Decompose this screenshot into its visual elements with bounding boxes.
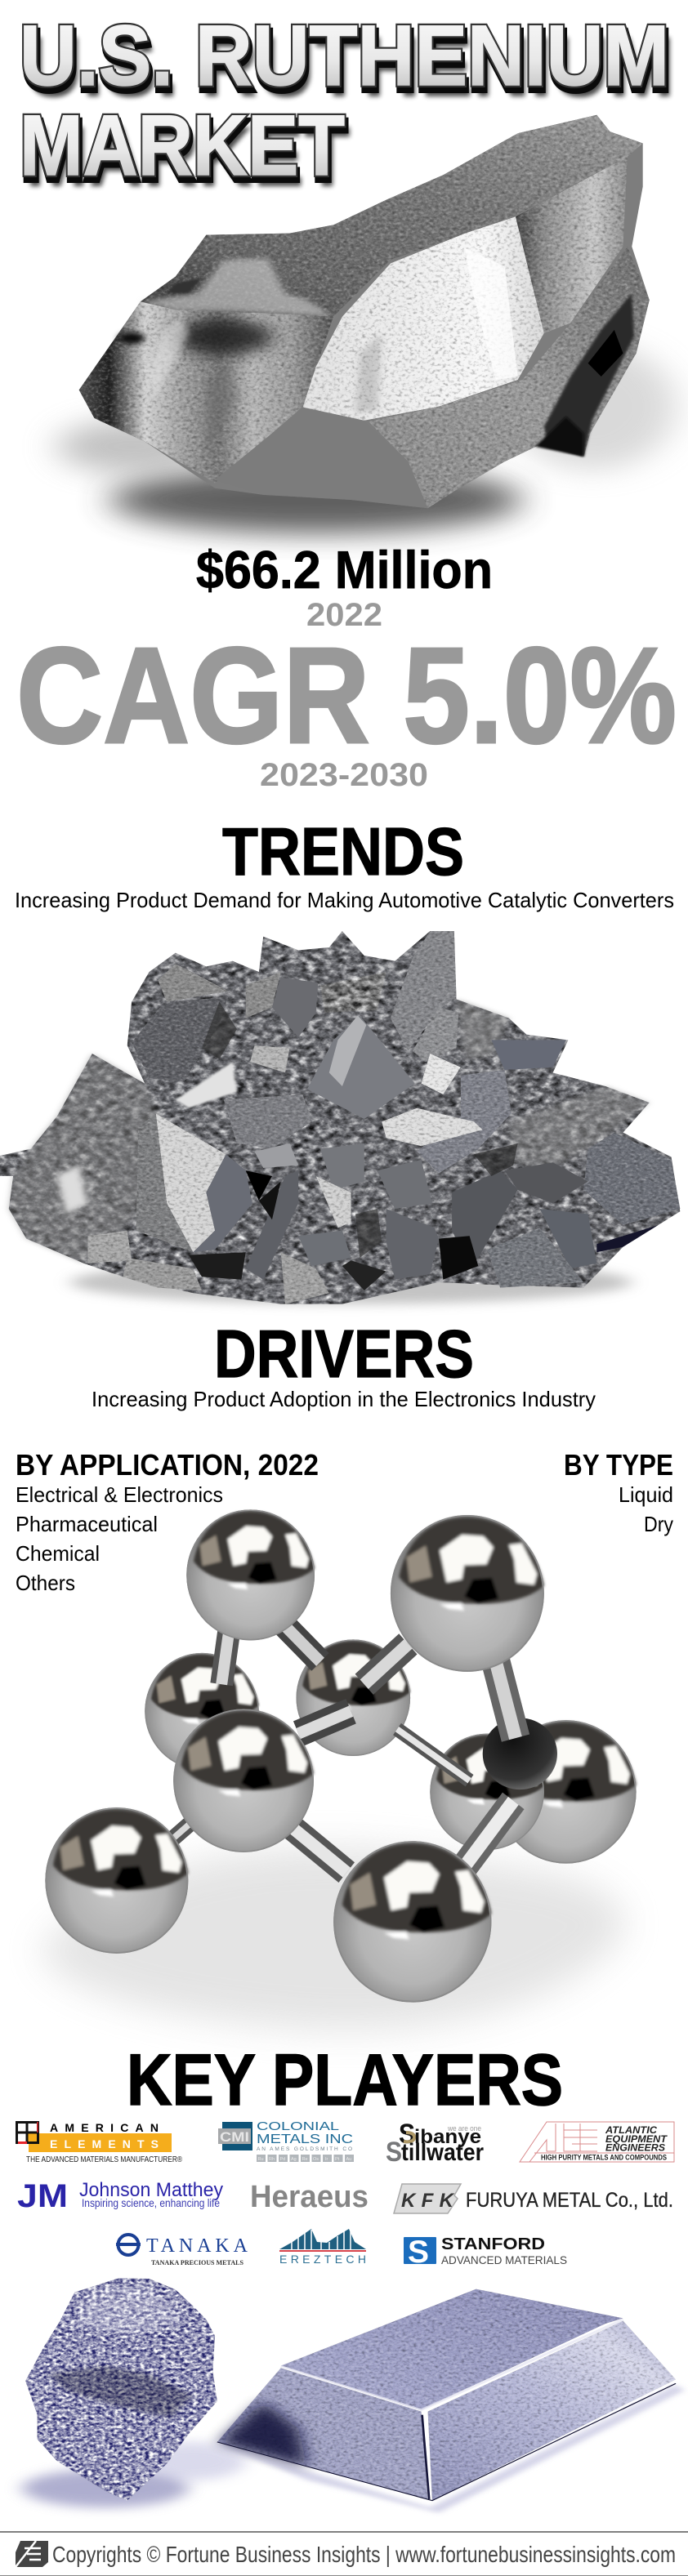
ingot shadow xyxy=(219,2385,685,2513)
nugget xyxy=(25,2278,217,2501)
logo: Atlantic Equipment Engineers xyxy=(520,2122,674,2162)
image: chrome molecule model xyxy=(39,1509,637,2030)
logo: Colonial Metals: Rh xyxy=(269,2157,275,2162)
trends description: Increasing Product Demand for Making Automotive Catalytic Converters xyxy=(15,888,674,912)
logo: Colonial Metals xyxy=(218,2119,354,2162)
rock ground shadow xyxy=(109,466,522,533)
title: U.S. Ruthenium Market: MARKET xyxy=(25,109,351,205)
logo: Stanford Advanced Materials: STANFORD xyxy=(441,2235,545,2253)
logo: Johnson Matthey: Johnson Matthey xyxy=(79,2179,223,2201)
title: U.S. Ruthenium Market: MARKET xyxy=(20,98,345,194)
molecule ground shadow xyxy=(39,1847,625,2030)
logo: Colonial Metals: AN AMES GOLDSMITH CO xyxy=(257,2146,352,2152)
logo: Sibanye Stillwater: S xyxy=(386,2137,402,2168)
logo: Sibanye Stillwater: we are one xyxy=(447,2124,481,2133)
title: U.S. Ruthenium Market: MARKET xyxy=(20,98,345,194)
logo: Colonial Metals: Ru xyxy=(258,2157,264,2162)
application list xyxy=(16,1482,223,1595)
segment heading: by type: BY TYPE xyxy=(564,1448,673,1482)
market value: $66.2 Million xyxy=(196,540,493,599)
logo: Atlantic Equipment Engineers: EQUIPMENT xyxy=(605,2133,668,2145)
logo: Colonial Metals: Pt xyxy=(335,2157,340,2162)
logo: Stanford Advanced Materials: ADVANCED MATERIALS xyxy=(441,2254,567,2266)
logo: American Elements: AMERICAN xyxy=(50,2121,159,2134)
logo: American Elements: THE ADVANCED MATERIALS MANUFACTURER® xyxy=(26,2155,183,2164)
logo: Atlantic Equipment Engineers: HIGH PURITY METALS AND COMPOUNDS xyxy=(541,2153,667,2161)
logo: Colonial Metals: Re xyxy=(302,2157,308,2162)
logo: Johnson Matthey: Inspiring science, enhancing life xyxy=(82,2196,220,2209)
logo: Sibanye Stillwater: S xyxy=(399,2119,415,2150)
logo: Ereztech: EREZTECH xyxy=(279,2253,366,2266)
logo: American Elements xyxy=(16,2121,183,2164)
type list xyxy=(619,1482,673,1536)
application list: Others xyxy=(16,1571,75,1595)
hero image: ruthenium rock xyxy=(57,115,676,533)
dark joint xyxy=(483,1718,557,1789)
logo: Colonial Metals: Os xyxy=(313,2157,319,2162)
icon: Fortune Business Insights logo xyxy=(16,2541,48,2567)
drivers description: Increasing Product Adoption in the Electronics Industry xyxy=(92,1387,596,1411)
application list: Electrical & Electronics xyxy=(16,1482,223,1507)
logo: Atlantic Equipment Engineers: ENGINEERS xyxy=(605,2141,665,2153)
heading: key players: KEY PLAYERS xyxy=(127,2039,563,2120)
application list: Pharmaceutical xyxy=(16,1512,158,1536)
logo: Colonial Metals: Pd xyxy=(279,2157,285,2162)
logo: American Elements: ELEMENTS xyxy=(50,2137,159,2150)
rear spheres xyxy=(145,1653,259,1769)
image: pile of ruthenium crystals xyxy=(0,931,680,1304)
bottom rule xyxy=(0,2575,688,2576)
logo: Johnson Matthey: JM xyxy=(17,2178,68,2214)
logo: Stanford Advanced Materials: S xyxy=(408,2235,429,2270)
forecast period: 2023-2030 xyxy=(260,757,428,793)
logo: Tanaka: TANAKA xyxy=(146,2235,248,2257)
logo: Heraeus: Heraeus xyxy=(250,2180,369,2214)
logo: Sibanye Stillwater: tillwater xyxy=(401,2139,484,2166)
logo: Sibanye Stillwater xyxy=(386,2119,484,2168)
title: U.S. Ruthenium Market: MARKET xyxy=(21,103,346,198)
nugget shadow xyxy=(22,2469,189,2507)
pile ground shadow xyxy=(70,1260,632,1304)
application list: Chemical xyxy=(16,1541,100,1566)
logo: Stanford Advanced Materials xyxy=(404,2235,567,2270)
logo: Sibanye Stillwater: ibanye xyxy=(414,2126,481,2148)
base year: 2022 xyxy=(306,597,382,633)
logo: Furuya Metal xyxy=(394,2184,673,2213)
logo: Colonial Metals: Ag xyxy=(291,2157,297,2162)
logo: Colonial Metals: CMI xyxy=(220,2129,249,2145)
footer rule xyxy=(0,2531,688,2533)
logo: Furuya Metal: KFK xyxy=(401,2190,455,2212)
logo: Johnson Matthey xyxy=(17,2178,223,2214)
logo: Colonial Metals: Au xyxy=(346,2157,351,2162)
title: U.S. Ruthenium Market xyxy=(20,8,675,205)
logo: Colonial Metals: COLONIAL xyxy=(257,2119,339,2133)
bonds xyxy=(147,1608,516,1873)
logo: Colonial Metals: METALS INC xyxy=(257,2133,353,2146)
heading: trends: TRENDS xyxy=(222,813,464,889)
logo: Tanaka xyxy=(116,2235,248,2266)
logo: Tanaka: TANAKA PRECIOUS METALS xyxy=(151,2259,244,2266)
logo: Colonial Metals: Ir xyxy=(325,2157,328,2162)
heading: drivers: DRIVERS xyxy=(214,1316,474,1392)
segment heading: by application: BY APPLICATION, 2022 xyxy=(16,1448,319,1482)
image: ruthenium nugget and ingot xyxy=(22,2278,685,2513)
logo: Atlantic Equipment Engineers: ATLANTIC xyxy=(605,2124,657,2136)
front spheres xyxy=(186,1509,315,1641)
type list: Liquid xyxy=(619,1482,673,1507)
type list: Dry xyxy=(644,1512,673,1536)
ingot xyxy=(281,2289,623,2410)
logo: Ereztech xyxy=(279,2229,366,2266)
